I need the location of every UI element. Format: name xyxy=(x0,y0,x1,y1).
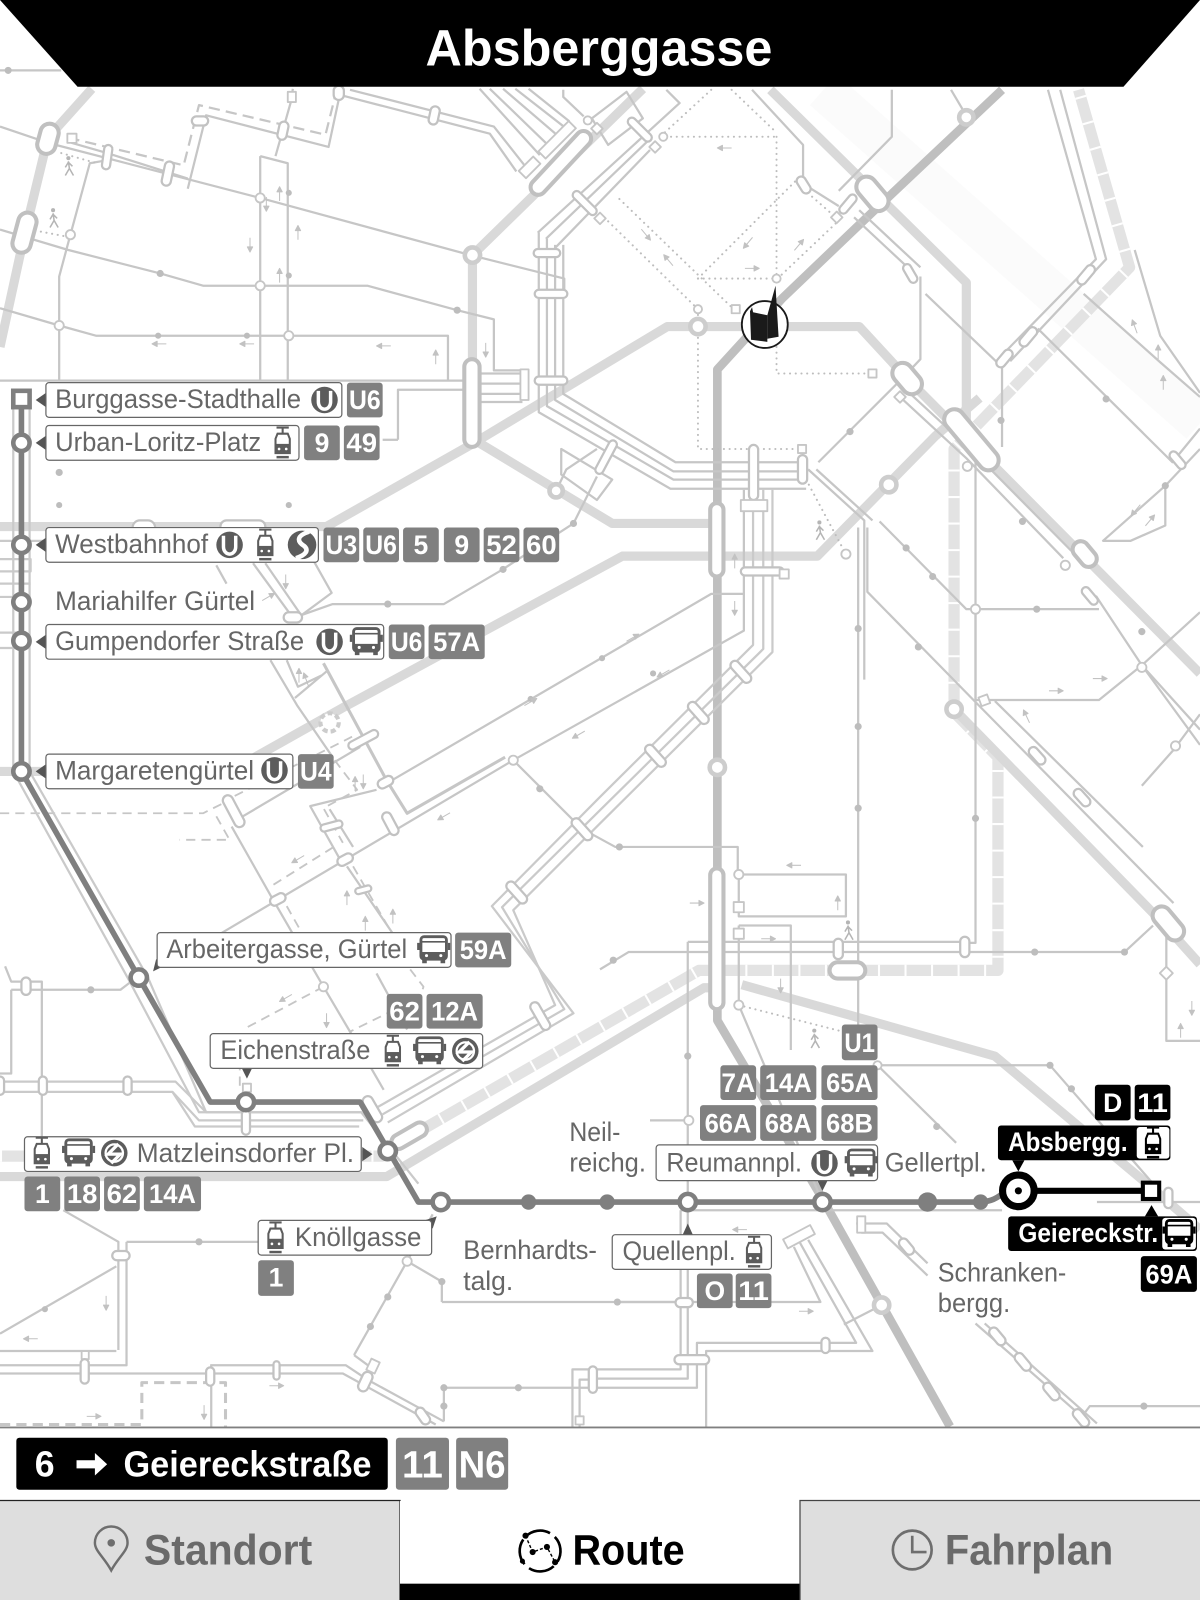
label: Eichenstraße: 12A xyxy=(431,996,478,1026)
title: Absberggasse xyxy=(426,19,772,76)
label: Quellenplatz: Quellenpl. xyxy=(622,1236,736,1266)
label: Neilreichg.: Neil- xyxy=(569,1117,620,1147)
label: Arbeitergasse, Gürtel xyxy=(153,933,511,971)
map: large interchange pills xyxy=(10,122,1188,1009)
label: Westbahnhof xyxy=(36,528,559,562)
icon: clock xyxy=(893,1531,932,1569)
label: Quellenplatz: 11 xyxy=(738,1276,769,1306)
line direction bar xyxy=(16,1438,508,1490)
label: Reumannplatz: 65A xyxy=(826,1068,873,1098)
label: Westbahnhof: U3 xyxy=(326,530,357,560)
line direction bar: N6 xyxy=(459,1444,506,1486)
label: Reumannplatz: 7A xyxy=(721,1068,755,1098)
label: Urban-Loritz-Platz: 49 xyxy=(346,428,377,458)
map: direction arrows xyxy=(23,145,1194,1419)
label: Urban-Loritz-Platz: Urban-Loritz-Platz xyxy=(55,427,261,457)
label: current stop Absberggasse: D xyxy=(1103,1088,1122,1118)
label: Schrankenbergg.: bergg. xyxy=(938,1288,1010,1318)
label: Arbeitergasse, Gürtel: 59A xyxy=(460,935,507,965)
icon: cathedral landmark xyxy=(742,286,788,348)
label: terminus Geiereckstraße: Geiereckstr. xyxy=(1018,1218,1158,1248)
label: Gellertplatz: Gellertpl. xyxy=(885,1147,987,1177)
map bottom rule xyxy=(0,1427,1200,1428)
label: Westbahnhof: 52 xyxy=(486,530,517,560)
label: Reumannplatz: 68B xyxy=(826,1109,873,1139)
label: Matzleinsdorfer Pl. xyxy=(24,1137,372,1211)
label: Reumannplatz: U1 xyxy=(844,1028,875,1058)
label: Margaretengürtel: Margaretengürtel xyxy=(55,756,254,786)
label: Reumannplatz xyxy=(656,1024,878,1191)
label: Knöllgasse xyxy=(258,1216,437,1296)
label: Schrankenbergg. xyxy=(934,1258,1071,1322)
header bar xyxy=(0,0,1200,87)
label: Reumannplatz: 66A xyxy=(705,1109,752,1139)
tab: Standort xyxy=(0,1500,400,1600)
label: Matzleinsdorfer Pl.: Matzleinsdorfer Pl. xyxy=(137,1138,354,1168)
tab: Route xyxy=(400,1501,800,1600)
label: Burggasse-Stadthalle: Burggasse-Stadthalle xyxy=(55,384,301,414)
tab: Fahrplan xyxy=(800,1500,1200,1600)
label: Reumannplatz: 68A xyxy=(765,1109,812,1139)
map: pedestrian icons xyxy=(50,156,853,1048)
icon: direction arrow xyxy=(77,1453,107,1476)
icon: route network xyxy=(520,1531,560,1571)
terminus marker xyxy=(1143,1183,1159,1199)
label: Neilreichg.: reichg. xyxy=(569,1147,646,1177)
label: Gumpendorfer Straße: U6 xyxy=(391,627,422,657)
label: Gumpendorfer Straße: Gumpendorfer Straße xyxy=(55,626,304,656)
label: Mariahilfer Gürtel: Mariahilfer Gürtel xyxy=(55,586,255,616)
tab: Route: Route xyxy=(572,1526,685,1574)
line direction bar: Geiereckstraße xyxy=(123,1445,371,1485)
label: Knöllgasse: Knöllgasse xyxy=(295,1222,421,1252)
label: Westbahnhof: 60 xyxy=(526,530,557,560)
label: Quellenplatz xyxy=(612,1223,771,1308)
label: Bernhardtstalg.: Bernhardts- xyxy=(463,1235,597,1265)
label: Eichenstraße xyxy=(210,994,483,1079)
route stops xyxy=(13,391,988,1212)
label: Quellenplatz: O xyxy=(704,1276,725,1306)
route line xyxy=(21,399,1151,1202)
label: Westbahnhof: 5 xyxy=(414,530,429,560)
label: Eichenstraße: Eichenstraße xyxy=(220,1035,370,1065)
label: terminus Geiereckstraße: 69A xyxy=(1145,1260,1192,1290)
line direction bar: 6 xyxy=(35,1445,55,1485)
label: Schrankenbergg.: Schranken- xyxy=(938,1258,1066,1288)
label: Matzleinsdorfer Pl.: 14A xyxy=(149,1179,196,1209)
label: current stop Absberggasse xyxy=(998,1085,1170,1171)
current stop marker xyxy=(1003,1175,1034,1207)
label: Bernhardtstalg.: talg. xyxy=(463,1266,513,1296)
label: Westbahnhof: U6 xyxy=(365,530,397,560)
label: Reumannplatz: 14A xyxy=(765,1068,812,1098)
line direction bar: 11 xyxy=(402,1444,443,1486)
label: Gumpendorfer Straße: 57A xyxy=(433,627,480,657)
label: Westbahnhof: 9 xyxy=(454,530,469,560)
label: Bernhardtstalg. xyxy=(459,1235,602,1298)
label: Eichenstraße: 62 xyxy=(389,996,420,1026)
label: Urban-Loritz-Platz: 9 xyxy=(315,428,329,458)
label: Matzleinsdorfer Pl.: 1 xyxy=(35,1179,50,1209)
label: Reumannplatz: Reumannpl. xyxy=(666,1147,802,1177)
label: Neilreichg. xyxy=(564,1117,650,1180)
label: Knöllgasse: 1 xyxy=(269,1263,284,1293)
label: Westbahnhof: Westbahnhof xyxy=(55,529,209,559)
icon: location pin xyxy=(95,1527,128,1570)
label: Urban-Loritz-Platz xyxy=(36,426,380,460)
label: current stop Absberggasse: 11 xyxy=(1137,1088,1168,1118)
label: terminus Geiereckstraße xyxy=(1008,1205,1197,1292)
label: Margaretengürtel xyxy=(36,754,334,789)
label: Matzleinsdorfer Pl.: 62 xyxy=(107,1179,137,1209)
label: Margaretengürtel: U4 xyxy=(300,757,332,787)
tab: Standort: Standort xyxy=(144,1526,312,1574)
label: Burggasse-Stadthalle xyxy=(36,383,383,417)
label: Burggasse-Stadthalle: U6 xyxy=(349,385,381,415)
label: Arbeitergasse, Gürtel: Arbeitergasse, Gürtel xyxy=(166,934,407,964)
label: Gumpendorfer Straße xyxy=(36,624,485,659)
label: current stop Absberggasse: Absbergg. xyxy=(1008,1127,1128,1157)
tab: Fahrplan: Fahrplan xyxy=(945,1526,1113,1574)
label: Matzleinsdorfer Pl.: 18 xyxy=(67,1179,97,1209)
